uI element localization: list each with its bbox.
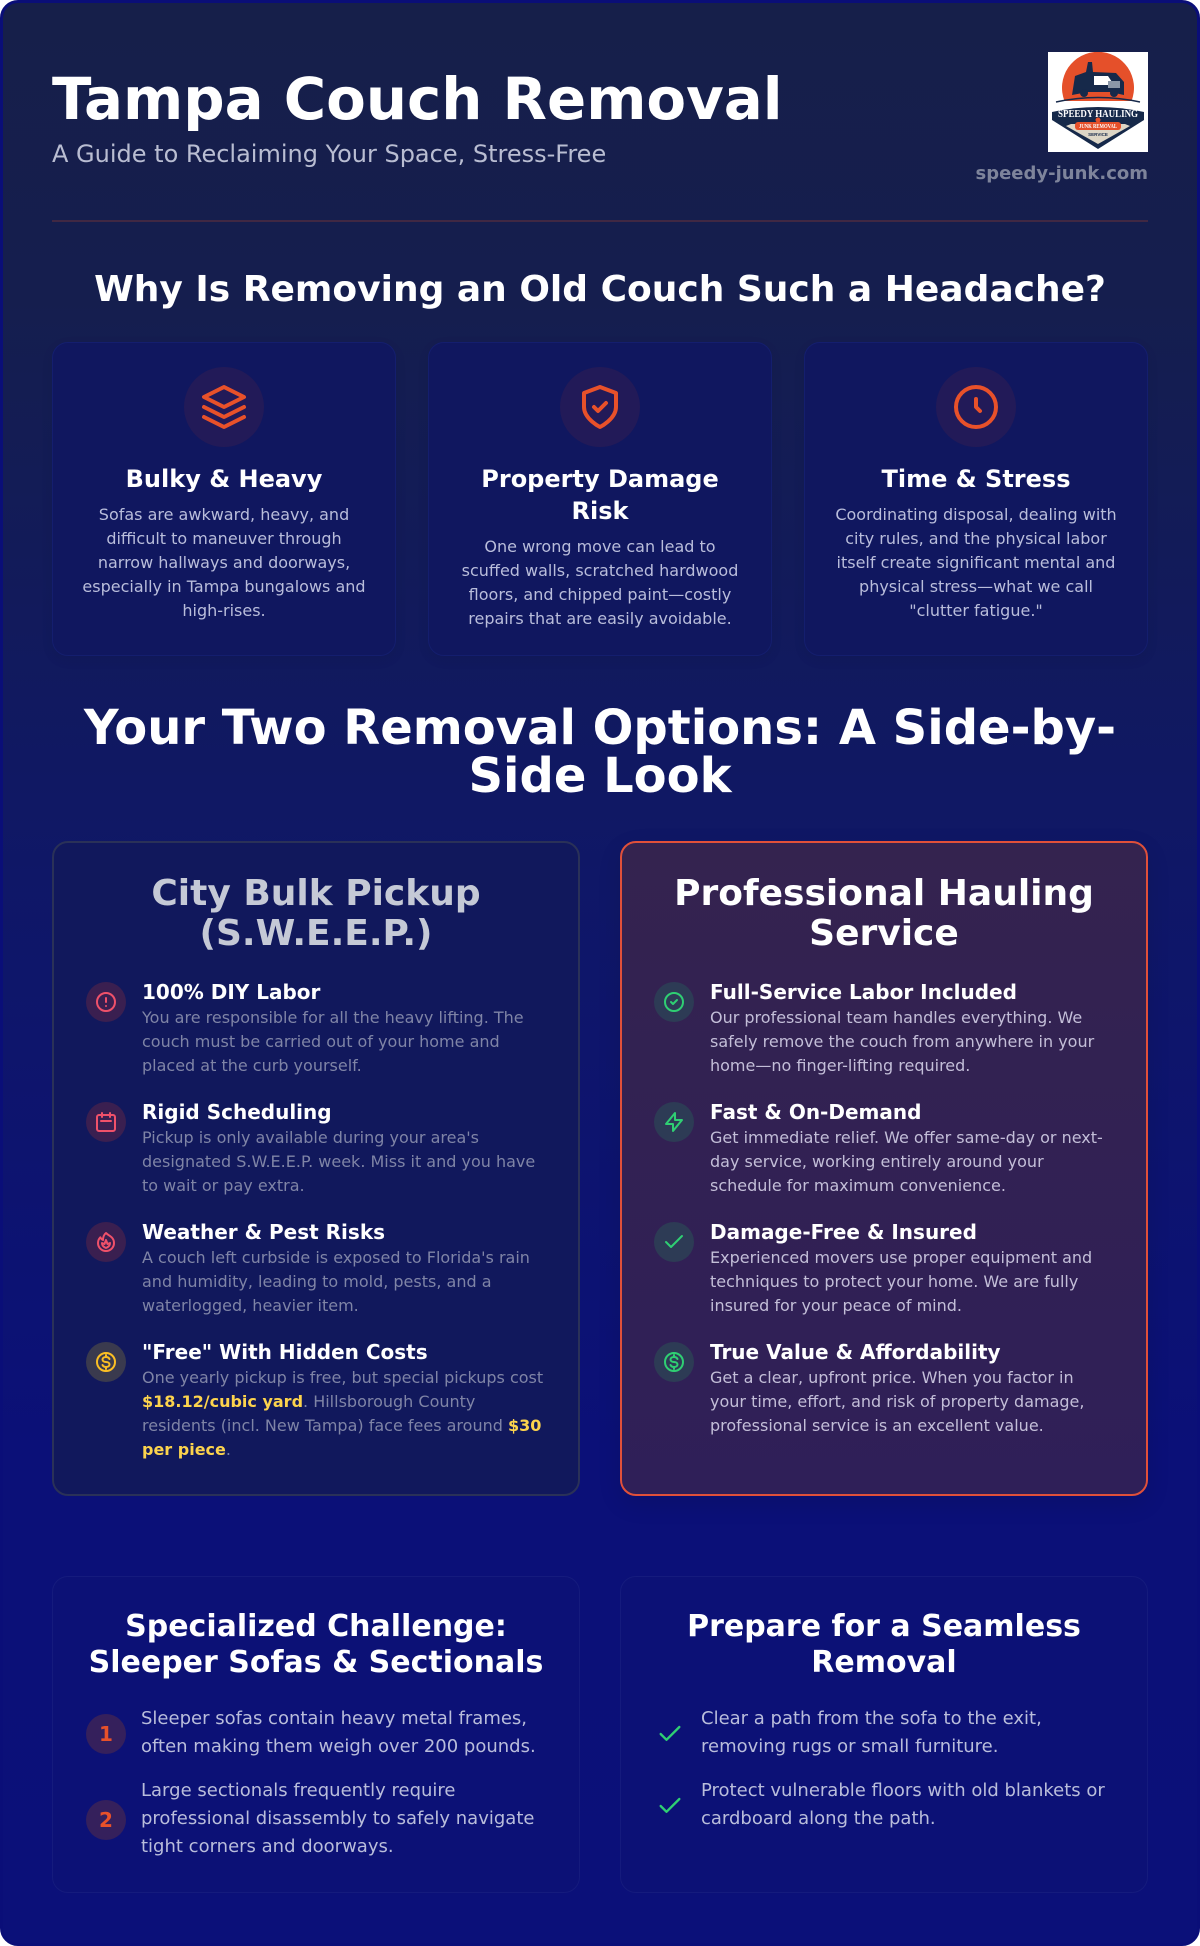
number badge 1: 1 [99, 1722, 113, 1746]
card text: physical stress—what we call [859, 577, 1093, 596]
item: weather: Weather & Pest Risks [142, 1220, 385, 1244]
panel: Property Damage Risk [428, 342, 772, 656]
item 2: professional disassembly to safely navigate [141, 1808, 534, 1829]
number badge 2 [86, 1800, 126, 1840]
icon: alert [86, 982, 126, 1022]
card text: especially in Tampa bungalows and [82, 577, 366, 596]
card text [462, 537, 738, 628]
card text: One wrong move can lead to [484, 537, 716, 556]
card heading: Time & Stress [882, 465, 1070, 493]
panel heading [151, 873, 481, 954]
card text: Sofas are awkward, heavy, and [99, 505, 349, 524]
item 1 [660, 1708, 1042, 1757]
title: Tampa Couch Removal [52, 65, 783, 133]
panel heading [687, 1609, 1081, 1680]
item 2: tight corners and doorways. [141, 1836, 394, 1857]
card text: repairs that are easily avoidable. [468, 609, 732, 628]
icon: bolt [654, 1102, 694, 1142]
item: rigid scheduling: to wait or pay extra. [142, 1176, 305, 1194]
icon: check [660, 1726, 680, 1742]
item: hidden costs: "Free" With Hidden Costs [142, 1340, 428, 1364]
card text: itself create significant mental and [837, 553, 1115, 572]
item: damage free: techniques to protect your home. We are fully [710, 1272, 1078, 1290]
item: true value: True Value & Affordability [710, 1340, 1001, 1364]
icon: check [654, 1222, 694, 1262]
heading: options: Side Look [468, 748, 732, 804]
number badge 2: 2 [99, 1808, 113, 1832]
item: true value: professional service is an excellent value. [710, 1416, 1044, 1434]
item: full service: Full-Service Labor Included [710, 980, 1017, 1004]
item 2: Large sectionals frequently require [141, 1780, 455, 1801]
item: rigid scheduling: Rigid Scheduling [142, 1100, 332, 1124]
logo: Speedy Hauling badge: JUNK REMOVAL [1079, 124, 1117, 130]
icon: shield check [560, 367, 640, 447]
item: fast: schedule for maximum convenience. [710, 1176, 1006, 1194]
panel heading [674, 873, 1094, 954]
panel heading: (S.W.E.E.P.) [200, 913, 432, 954]
panel heading: Prepare for a Seamless [687, 1609, 1081, 1644]
card heading: Risk [572, 497, 628, 525]
item 1 [86, 1708, 536, 1757]
item: DIY labor: placed at the curb yourself. [142, 1056, 362, 1074]
item: hidden costs [86, 1340, 543, 1458]
icon: dollar [654, 1342, 694, 1382]
item: damage free [654, 1220, 1092, 1314]
item: damage free: Experienced movers use proper equipment and [710, 1248, 1092, 1266]
item: fast: day service, working entirely around your [710, 1152, 1044, 1170]
icon: check [660, 1798, 680, 1814]
item: full service: safely remove the couch from anywhere in your [710, 1032, 1094, 1050]
panel: City Bulk Pickup [52, 841, 580, 1496]
item: true value: your time, effort, and risk of property damage, [710, 1392, 1084, 1410]
item 1: Clear a path from the sofa to the exit, [701, 1708, 1042, 1729]
item: DIY labor: couch must be carried out of your home and [142, 1032, 500, 1050]
item 1: often making them weigh over 200 pounds. [141, 1736, 536, 1757]
card text [82, 505, 366, 620]
item 1: Sleeper sofas contain heavy metal frames, [141, 1708, 527, 1729]
item: hidden costs: per piece. [142, 1440, 231, 1458]
logo: Speedy Hauling badge: SERVICE [1088, 132, 1108, 137]
item: damage free: Damage-Free & Insured [710, 1220, 977, 1244]
card heading: Bulky & Heavy [126, 465, 322, 493]
heading: options [84, 700, 1116, 804]
icon: check circle [654, 982, 694, 1022]
item: weather: and humidity, leading to mold, pests, and a [142, 1272, 492, 1290]
heading: why: Why Is Removing an Old Couch Such a Headache? [94, 269, 1106, 310]
subtitle: A Guide to Reclaiming Your Space, Stress-Free [52, 140, 606, 168]
panel: Specialized Challenge [52, 1576, 580, 1893]
item: DIY labor: You are responsible for all the heavy lifting. The [142, 1008, 524, 1026]
item: hidden costs: residents (incl. New Tampa) face fees around $30 [142, 1416, 541, 1434]
panel: Professional Hauling [620, 841, 1148, 1496]
icon: flame [86, 1222, 126, 1262]
header [52, 52, 1148, 184]
card text: "clutter fatigue." [909, 601, 1043, 620]
card text: scuffed walls, scratched hardwood [462, 561, 738, 580]
number badge 1 [86, 1714, 126, 1754]
panel: Time & Stress [804, 342, 1148, 656]
card text [835, 505, 1117, 620]
item: weather: waterlogged, heavier item. [142, 1296, 359, 1314]
icon: layers [184, 367, 264, 447]
panel: Prepare [620, 1576, 1148, 1893]
panel heading [89, 1609, 543, 1680]
panel heading: Sleeper Sofas & Sectionals [89, 1645, 543, 1680]
icon: calendar [86, 1102, 126, 1142]
item 2: Protect vulnerable floors with old blankets or [701, 1780, 1105, 1801]
panel heading: City Bulk Pickup [151, 873, 481, 914]
item: true value [654, 1340, 1084, 1434]
icon: clock [936, 367, 1016, 447]
heading: options: Your Two Removal Options: A Side-by- [84, 700, 1116, 756]
item: full service: Our professional team handles everything. We [710, 1008, 1082, 1026]
card heading: Property Damage [481, 465, 719, 493]
item 2 [86, 1780, 534, 1857]
card text: high-rises. [182, 601, 266, 620]
item: weather [86, 1220, 530, 1314]
item: rigid scheduling: designated S.W.E.E.P. week. Miss it and you have [142, 1152, 535, 1170]
card text: difficult to maneuver through [106, 529, 342, 548]
panel heading: Service [809, 913, 959, 954]
panel heading: Specialized Challenge: [125, 1609, 507, 1644]
card text: floors, and chipped paint—costly [469, 585, 731, 604]
divider [52, 220, 1148, 222]
card text: city rules, and the physical labor [845, 529, 1107, 548]
item: true value: Get a clear, upfront price. When you factor in [710, 1368, 1074, 1386]
logo: Speedy Hauling badge [1048, 52, 1148, 152]
item 2 [660, 1780, 1105, 1829]
item: rigid scheduling: Pickup is only available during your area's [142, 1128, 479, 1146]
logo: Speedy Hauling badge: SPEEDY HAULING [1058, 109, 1138, 120]
panel: Bulky & Heavy [52, 342, 396, 656]
item: weather: A couch left curbside is exposed to Florida's rain [142, 1248, 530, 1266]
item: DIY labor: 100% DIY Labor [142, 980, 320, 1004]
item: fast [654, 1100, 1103, 1194]
item: fast: Get immediate relief. We offer same-day or next- [710, 1128, 1103, 1146]
item: damage free: insured for your peace of mind. [710, 1296, 962, 1314]
card heading [481, 465, 719, 525]
item: hidden costs: One yearly pickup is free, but special pickups cost [142, 1368, 543, 1386]
item 1: removing rugs or small furniture. [701, 1736, 998, 1757]
item 2: cardboard along the path. [701, 1808, 936, 1829]
panel heading: Professional Hauling [674, 873, 1094, 914]
panel heading: Removal [811, 1645, 957, 1680]
item: full service [654, 980, 1094, 1074]
card text: Coordinating disposal, dealing with [835, 505, 1117, 524]
item: DIY labor [86, 980, 524, 1074]
item: full service: home—no finger-lifting required. [710, 1056, 970, 1074]
item: hidden costs: $18.12/cubic yard. Hillsborough County [142, 1392, 475, 1410]
card text: narrow hallways and doorways, [98, 553, 350, 572]
website: speedy-junk.com [975, 163, 1148, 184]
item: rigid scheduling [86, 1100, 535, 1194]
icon: dollar [86, 1342, 126, 1382]
item: fast: Fast & On-Demand [710, 1100, 921, 1124]
